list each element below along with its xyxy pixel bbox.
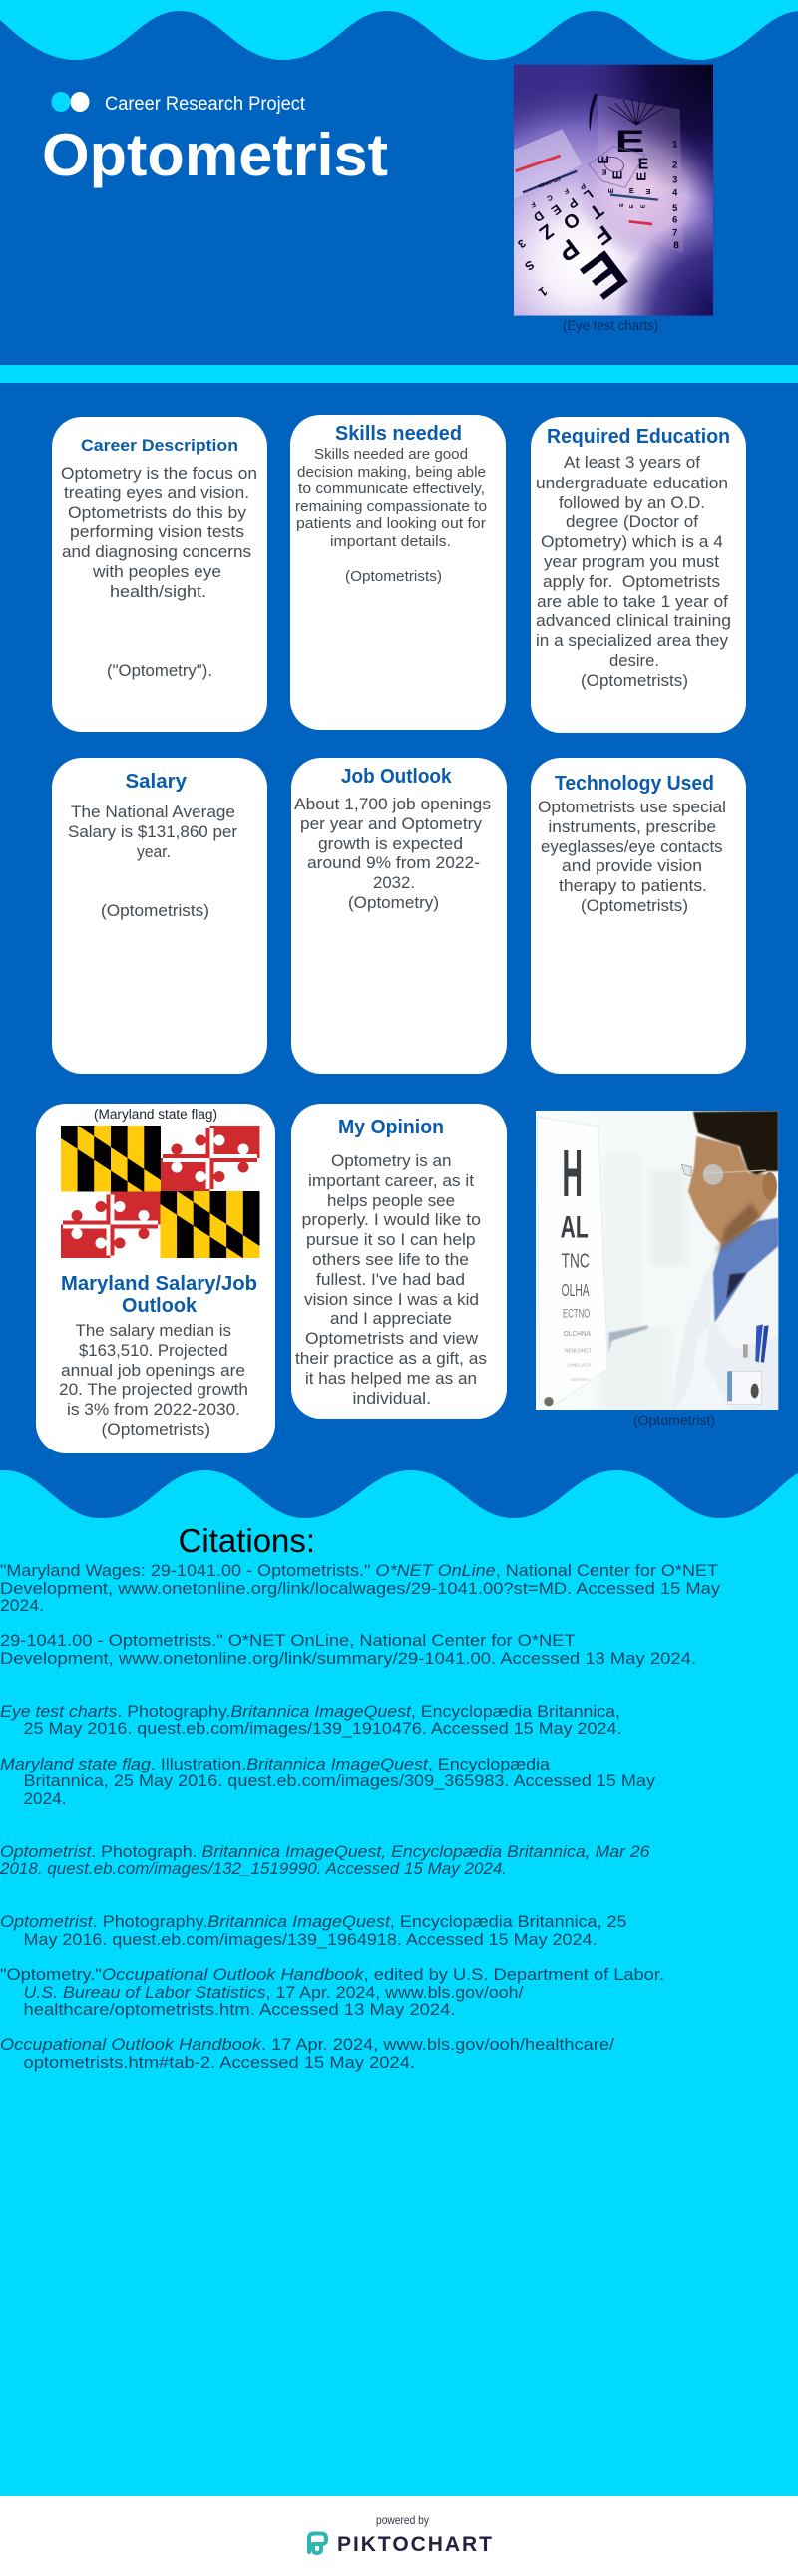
text: technology used body — [538, 799, 726, 915]
text: skills needed body: important details. — [330, 534, 451, 550]
citations list: 2024. — [24, 1789, 66, 1808]
image: eye test charts: E — [629, 204, 635, 208]
text: required education body: Optometry) which is a 4 — [541, 533, 723, 551]
image: optometrist with eye chart: OLCHNA — [564, 1329, 591, 1338]
bottom wave and citations background — [0, 1470, 798, 2496]
image: eye test charts: C — [545, 193, 554, 203]
citations list: U.S. Bureau of Labor Statistics , 17 Apr. 2024, www.bls.gov/ooh/ — [24, 1983, 524, 2002]
citations list: healthcare/optometrists.htm. Accessed 13 May 2024. — [24, 2000, 455, 2019]
heading: technology used: Technology Used — [555, 773, 714, 795]
text: maryland body: (Optometrists) — [102, 1421, 210, 1439]
text: my opinion body: Optometrists and view — [305, 1330, 478, 1348]
citations list: "Optometry." Occupational Outlook Handbook , edited by U.S. Department of Labor. — [0, 1965, 664, 1984]
text: skills needed body: patients and looking out for — [296, 516, 486, 532]
image: eye test charts: E — [596, 155, 612, 163]
header block — [42, 92, 388, 188]
citations heading: Citations: — [179, 1522, 315, 1559]
image: eye test charts: 8 — [673, 240, 679, 251]
text: career description body: ("Optometry"). — [107, 662, 212, 680]
text: job outlook body: per year and Optometry — [300, 815, 483, 833]
image: eye test charts: P — [553, 233, 585, 268]
panel: required education — [531, 417, 746, 733]
text: my opinion body: vision since I was a kid — [304, 1291, 479, 1309]
citations list: Maryland state flag . Illustration. Britannica ImageQuest , Encyclopædia — [0, 1755, 551, 1773]
text: required education body: undergraduate education — [536, 475, 728, 492]
text: skills needed body: (Optometrists) — [345, 569, 442, 585]
caption: eye test charts: (Eye test charts) — [563, 318, 658, 333]
image: eye test charts: EFLOPZD — [537, 175, 561, 189]
citations list: optometrists.htm#tab-2. Accessed 15 May 2024. — [24, 2053, 415, 2072]
text: maryland body: annual job openings are — [61, 1362, 245, 1380]
text: salary body — [68, 804, 238, 920]
citations list: Optometrist. Photograph. Britannica ImageQuest, Encyclopædia Britannica, Mar 26 — [0, 1842, 650, 1861]
image: maryland flag — [61, 1126, 259, 1258]
image: eye test charts: 7 — [672, 228, 677, 238]
text: skills needed body: to communicate effectively, — [298, 482, 485, 497]
text: skills needed body: remaining compassionate to — [295, 499, 487, 515]
image: eye test charts: F — [562, 186, 571, 197]
citations list: Optometrist . Photography. Britannica ImageQuest , Encyclopædia Britannica, 25 — [0, 1912, 626, 1931]
heading: my opinion: My Opinion — [338, 1117, 444, 1138]
text: my opinion body: individual. — [353, 1390, 431, 1408]
text: technology used body: therapy to patients. — [559, 877, 707, 895]
image: eye test charts: 4 — [672, 188, 678, 198]
text: technology used body: instruments, prescribe — [549, 818, 716, 836]
text: my opinion body: others see life to the — [312, 1251, 469, 1269]
panel: career description — [52, 417, 267, 732]
icon: two dots — [52, 92, 90, 112]
text: salary body: Salary is $131,860 per — [68, 823, 238, 841]
heading: salary: Salary — [126, 771, 188, 793]
powered by label: powered by — [376, 2513, 429, 2527]
image: eye test charts: 5 — [672, 203, 677, 213]
text: my opinion body: pursue it so I can help — [306, 1231, 475, 1249]
heading: career description: Career Description — [81, 436, 238, 455]
text: job outlook body: 2032. — [373, 874, 415, 892]
text: salary body: The National Average — [71, 804, 235, 821]
text: skills needed body: Skills needed are good — [314, 447, 468, 463]
image: optometrist with eye chart: TNC — [562, 1250, 590, 1273]
text: career description body: Optometrists do this by — [68, 504, 247, 522]
citations list: 25 May 2016. quest.eb.com/images/139_1910476. Accessed 15 May 2024. — [24, 1719, 622, 1738]
image: eye test charts: O — [559, 207, 584, 233]
image: eye test charts: E — [609, 170, 624, 179]
citations list: 2024. — [0, 1596, 44, 1615]
image: eye test charts: E — [634, 172, 649, 181]
citations list: Britannica, 25 May 2016. quest.eb.com/images/309_365983. Accessed 15 May — [24, 1771, 656, 1790]
subtitle: Career Research Project — [105, 94, 306, 115]
heading: skills needed: Skills needed — [335, 423, 462, 445]
text: required education body: (Optometrists) — [581, 672, 688, 690]
citations list: May 2016. quest.eb.com/images/139_1964918. Accessed 15 May 2024. — [24, 1930, 597, 1949]
image: eye test charts: 6 — [672, 214, 677, 224]
text: technology used body: and provide vision — [562, 857, 702, 875]
text: my opinion body — [295, 1152, 487, 1408]
image: eye test charts: E — [629, 186, 634, 195]
text: required education body: in a specialized area they — [536, 632, 729, 650]
text: required education body: year program you must — [544, 553, 719, 571]
image: optometrist with eye chart — [536, 1111, 778, 1411]
text: career description body — [61, 465, 257, 680]
text: technology used body: Optometrists use special — [538, 799, 726, 816]
image: eye test charts: E — [619, 203, 625, 207]
piktochart wordmark: PIKTOCHART — [337, 2533, 492, 2556]
heading: required education: Required Education — [547, 426, 730, 448]
text: maryland body: 20. The projected growth — [59, 1381, 248, 1399]
text: maryland body: $163,510. Projected — [79, 1342, 227, 1360]
heading: maryland salary/job outlook — [61, 1273, 257, 1317]
text: career description body: health/sight. — [110, 583, 206, 601]
panel: technology used — [531, 758, 746, 1074]
image: eye test charts: E — [601, 168, 606, 177]
text: my opinion body: properly. I would like to — [301, 1211, 481, 1229]
text: career description body: performing vision tests — [70, 523, 244, 541]
heading: maryland salary/job outlook: Maryland Salary/Job — [61, 1273, 257, 1295]
citations list: "Maryland Wages: 29-1041.00 - Optometrists." O*NET OnLine , National Center for O*NET — [0, 1561, 718, 1580]
image: optometrist with eye chart: LHNELACO — [568, 1363, 592, 1368]
image: eye test charts: E — [645, 187, 650, 196]
text: my opinion body: important career, as it — [308, 1172, 474, 1190]
image: optometrist with eye chart: OLHA — [562, 1280, 590, 1300]
image: eye test charts: 2 — [672, 160, 677, 169]
image: eye test charts: S — [522, 258, 537, 274]
image: eye test charts: P — [565, 195, 581, 211]
image: optometrist with eye chart: NENLOHCT — [565, 1349, 592, 1355]
citations list: 2018. quest.eb.com/images/132_1519990. Accessed 15 May 2024. — [0, 1859, 507, 1878]
text: required education body: At least 3 years of — [564, 454, 700, 472]
text: technology used body: (Optometrists) — [581, 897, 688, 915]
footer: powered by piktochart — [0, 2496, 798, 2576]
image: eye test charts: E — [615, 124, 644, 159]
image: eye test charts: F — [589, 219, 616, 250]
caption: optometrist photo: (Optometrist) — [633, 1413, 715, 1428]
text: required education body: degree (Doctor of — [566, 513, 698, 531]
top wave banner — [0, 0, 798, 60]
image: eye test charts: E — [638, 156, 649, 172]
image: eye test charts: 1 — [536, 284, 550, 299]
text: maryland body: The salary median is — [76, 1322, 231, 1340]
heading: job outlook: Job Outlook — [341, 766, 452, 788]
text: job outlook body: (Optometry) — [348, 894, 439, 912]
panel: maryland salary and job outlook — [36, 1104, 275, 1453]
citations list — [0, 1561, 721, 2072]
text: job outlook body: growth is expected — [318, 835, 463, 853]
text: my opinion body: and I appreciate — [330, 1310, 452, 1328]
image: eye test charts: P — [579, 181, 588, 191]
text: career description body: with peoples eye — [92, 563, 221, 581]
text: technology used body: eyeglasses/eye contacts — [541, 838, 722, 856]
text: required education body: desire. — [609, 652, 659, 670]
citations list: 29-1041.00 - Optometrists." O*NET OnLine, National Center for O*NET — [0, 1631, 575, 1650]
image: optometrist with eye chart: H — [562, 1137, 583, 1211]
text: job outlook body — [294, 796, 491, 912]
text: my opinion body: helps people see — [327, 1192, 455, 1210]
citations list: Eye test charts . Photography. Britannica ImageQuest , Encyclopædia Britannica, — [0, 1702, 620, 1721]
image: eye test charts: 3 — [515, 236, 528, 250]
image: eye test charts: L — [581, 187, 596, 203]
text: required education body: advanced clinical training — [536, 612, 731, 630]
text: skills needed body — [295, 447, 487, 585]
image: eye test charts: 3 — [672, 174, 677, 184]
text: skills needed body: decision making, being able — [297, 465, 486, 481]
image: eye test charts: E — [641, 204, 647, 208]
text: salary body: year. — [137, 843, 171, 861]
text: career description body: Optometry is the focus on — [61, 465, 257, 483]
caption: maryland state flag: (Maryland state flag) — [94, 1107, 217, 1122]
image: eye test charts — [514, 65, 713, 316]
image: optometrist with eye chart: AL — [561, 1208, 589, 1244]
image: eye test charts: D — [531, 208, 547, 225]
text: required education body: apply for. Optometrists — [543, 573, 720, 591]
divider strip — [0, 365, 798, 383]
text: maryland body: is 3% from 2022-2030. — [67, 1401, 240, 1419]
text: maryland body — [59, 1322, 248, 1439]
image: eye test charts: 1 — [672, 139, 677, 149]
image: optometrist with eye chart: ONTPEFO — [571, 1378, 590, 1382]
text: required education body — [536, 454, 731, 690]
text: salary body: (Optometrists) — [101, 902, 209, 920]
panel: job outlook — [291, 758, 507, 1074]
text: my opinion body: Optometry is an — [331, 1152, 451, 1170]
image: eye test charts: E — [606, 188, 615, 193]
panel: salary — [52, 758, 267, 1074]
image: eye test charts: E — [549, 201, 564, 218]
text: my opinion body: their practice as a gift, as — [295, 1350, 487, 1368]
title: Optometrist — [42, 122, 388, 188]
icon: piktochart logo — [309, 2534, 326, 2553]
text: job outlook body: About 1,700 job openings — [294, 796, 491, 813]
text: career description body: treating eyes and vision. — [64, 484, 249, 502]
text: required education body: are able to take 1 year of — [537, 593, 728, 611]
text: my opinion body: fullest. I've had bad — [316, 1271, 465, 1289]
image: eye test charts: E — [570, 238, 638, 311]
image: eye test charts: Z — [535, 219, 557, 243]
panel: skills needed — [290, 415, 506, 730]
image: eye test charts: F — [529, 200, 537, 210]
text: job outlook body: around 9% from 2022- — [307, 854, 480, 872]
citations list: Occupational Outlook Handbook . 17 Apr. 2024, www.bls.gov/ooh/healthcare/ — [0, 2035, 614, 2054]
panel: my opinion — [291, 1104, 507, 1419]
image: optometrist with eye chart: ECTNO — [563, 1307, 590, 1321]
text: career description body: and diagnosing concerns — [62, 543, 251, 561]
text: my opinion body: it has helped me as an — [305, 1370, 477, 1388]
image: eye test charts: T — [586, 199, 607, 223]
citations list: Development, www.onetonline.org/link/summary/29-1041.00. Accessed 13 May 2024. — [0, 1649, 696, 1668]
text: required education body: followed by an O.D. — [559, 494, 705, 512]
heading: maryland salary/job outlook: Outlook — [122, 1295, 198, 1317]
citations list: Development, www.onetonline.org/link/localwages/29-1041.00?st=MD. Accessed 15 May — [0, 1579, 721, 1598]
